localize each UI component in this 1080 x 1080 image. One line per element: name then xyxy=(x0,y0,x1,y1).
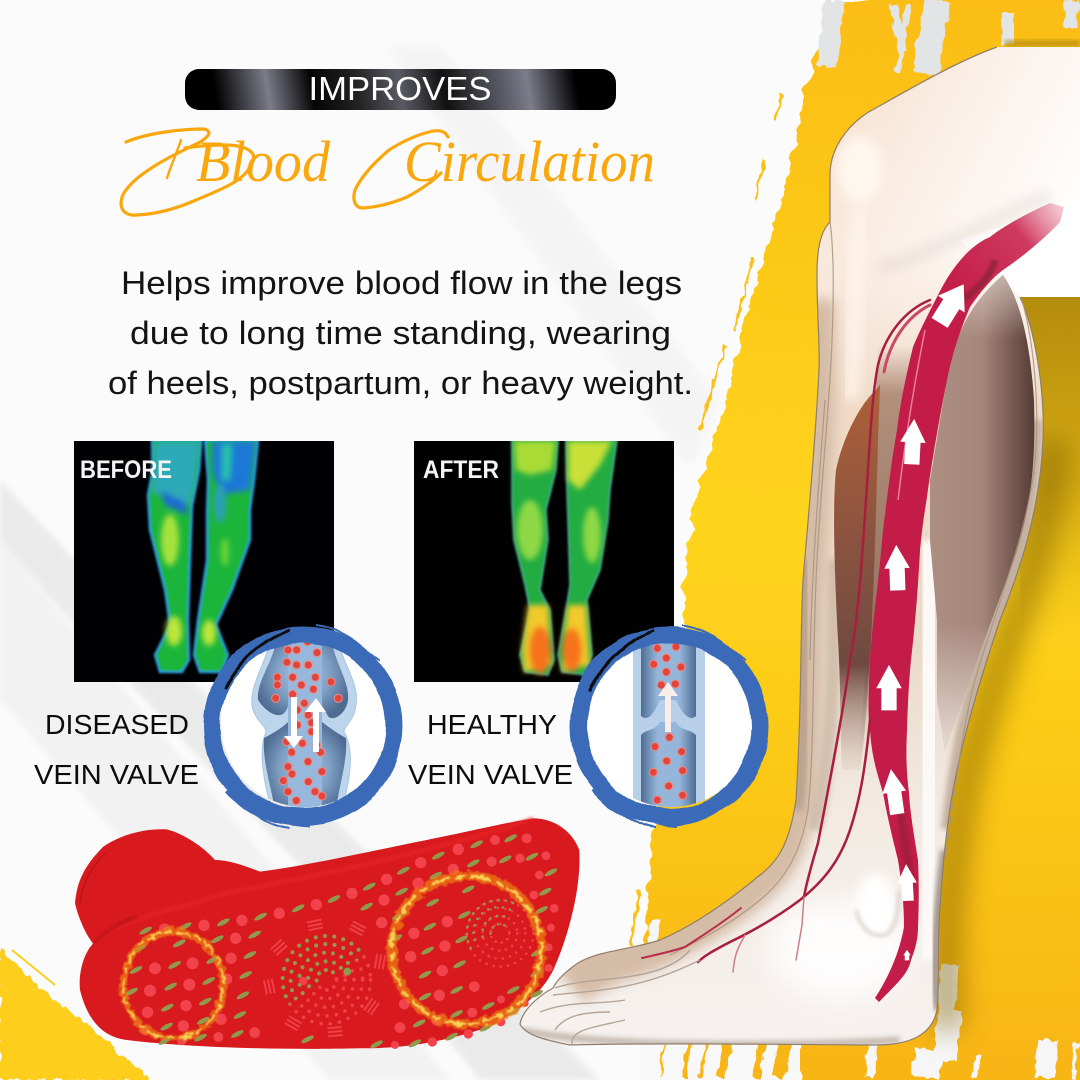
leg shadow on yellow xyxy=(945,40,1080,1030)
blue brush ring xyxy=(578,625,760,828)
script title: Circulation xyxy=(404,129,655,194)
script title: Blood xyxy=(196,129,331,194)
label: healthy vein valve: HEALTHY xyxy=(427,709,557,740)
label: diseased vein valve xyxy=(34,709,199,790)
leg outline xyxy=(520,47,1043,1045)
yellow corner bottom left xyxy=(0,948,150,1080)
description text: Helps improve blood flow in the legs xyxy=(121,265,682,301)
white flecks on yellow, top xyxy=(826,0,1072,74)
flow arrow xyxy=(658,682,678,732)
yellow sliver strokes xyxy=(630,95,781,945)
before label: BEFORE xyxy=(80,456,172,484)
label: healthy vein valve: VEIN VALVE xyxy=(408,759,573,790)
heading pill: IMPROVES xyxy=(308,70,492,107)
white area under foot xyxy=(640,1036,800,1080)
red blood cells xyxy=(272,638,342,805)
thermal image: after xyxy=(414,440,674,682)
description text xyxy=(108,265,693,401)
healthy vein circle icon xyxy=(578,625,760,828)
blue brush ring xyxy=(212,625,394,828)
white streaks lower right xyxy=(650,920,1076,1078)
thin veins xyxy=(642,300,930,972)
red grip dots xyxy=(140,833,559,1049)
calf muscle back xyxy=(930,275,1034,750)
heading pill xyxy=(185,69,616,110)
before legs base xyxy=(148,440,258,672)
heel mandala xyxy=(467,900,533,967)
shin layer lines xyxy=(670,222,1037,955)
sock silhouette xyxy=(75,818,580,1049)
yellow brush background xyxy=(630,0,1080,1080)
rice grips xyxy=(124,833,558,1050)
front muscle xyxy=(834,385,880,770)
description text: of heels, postpartum, or heavy weight. xyxy=(108,365,693,401)
vein arrows xyxy=(876,276,977,960)
description text: due to long time standing, wearing xyxy=(130,315,671,351)
after warm zones xyxy=(514,441,612,674)
fire ring right xyxy=(392,876,542,1024)
label: healthy vein valve xyxy=(408,709,573,790)
centre mandala xyxy=(283,936,371,1024)
red heated sock xyxy=(75,818,580,1050)
inner leg shading xyxy=(500,136,1080,1050)
before cold zones xyxy=(152,441,256,646)
toe creases xyxy=(540,950,700,1045)
mid muscle xyxy=(858,345,915,760)
yellow streaks below the foot xyxy=(660,1042,785,1078)
flow arrows xyxy=(284,697,326,752)
leg illustration xyxy=(500,47,1080,1050)
thermal image: before xyxy=(74,440,334,682)
diseased vein circle icon xyxy=(212,625,394,828)
red blood cells xyxy=(649,643,687,804)
after label: AFTER xyxy=(423,456,499,484)
trigram bars xyxy=(264,920,385,1036)
after legs base xyxy=(512,440,617,675)
label: diseased vein valve: VEIN VALVE xyxy=(34,759,199,790)
white tendon highlight xyxy=(925,540,933,960)
main vein xyxy=(868,203,1064,1002)
fire ring left xyxy=(123,932,223,1038)
script title xyxy=(121,129,655,215)
leg silhouette xyxy=(520,47,1080,1045)
label: diseased vein valve: DISEASED xyxy=(45,709,189,740)
